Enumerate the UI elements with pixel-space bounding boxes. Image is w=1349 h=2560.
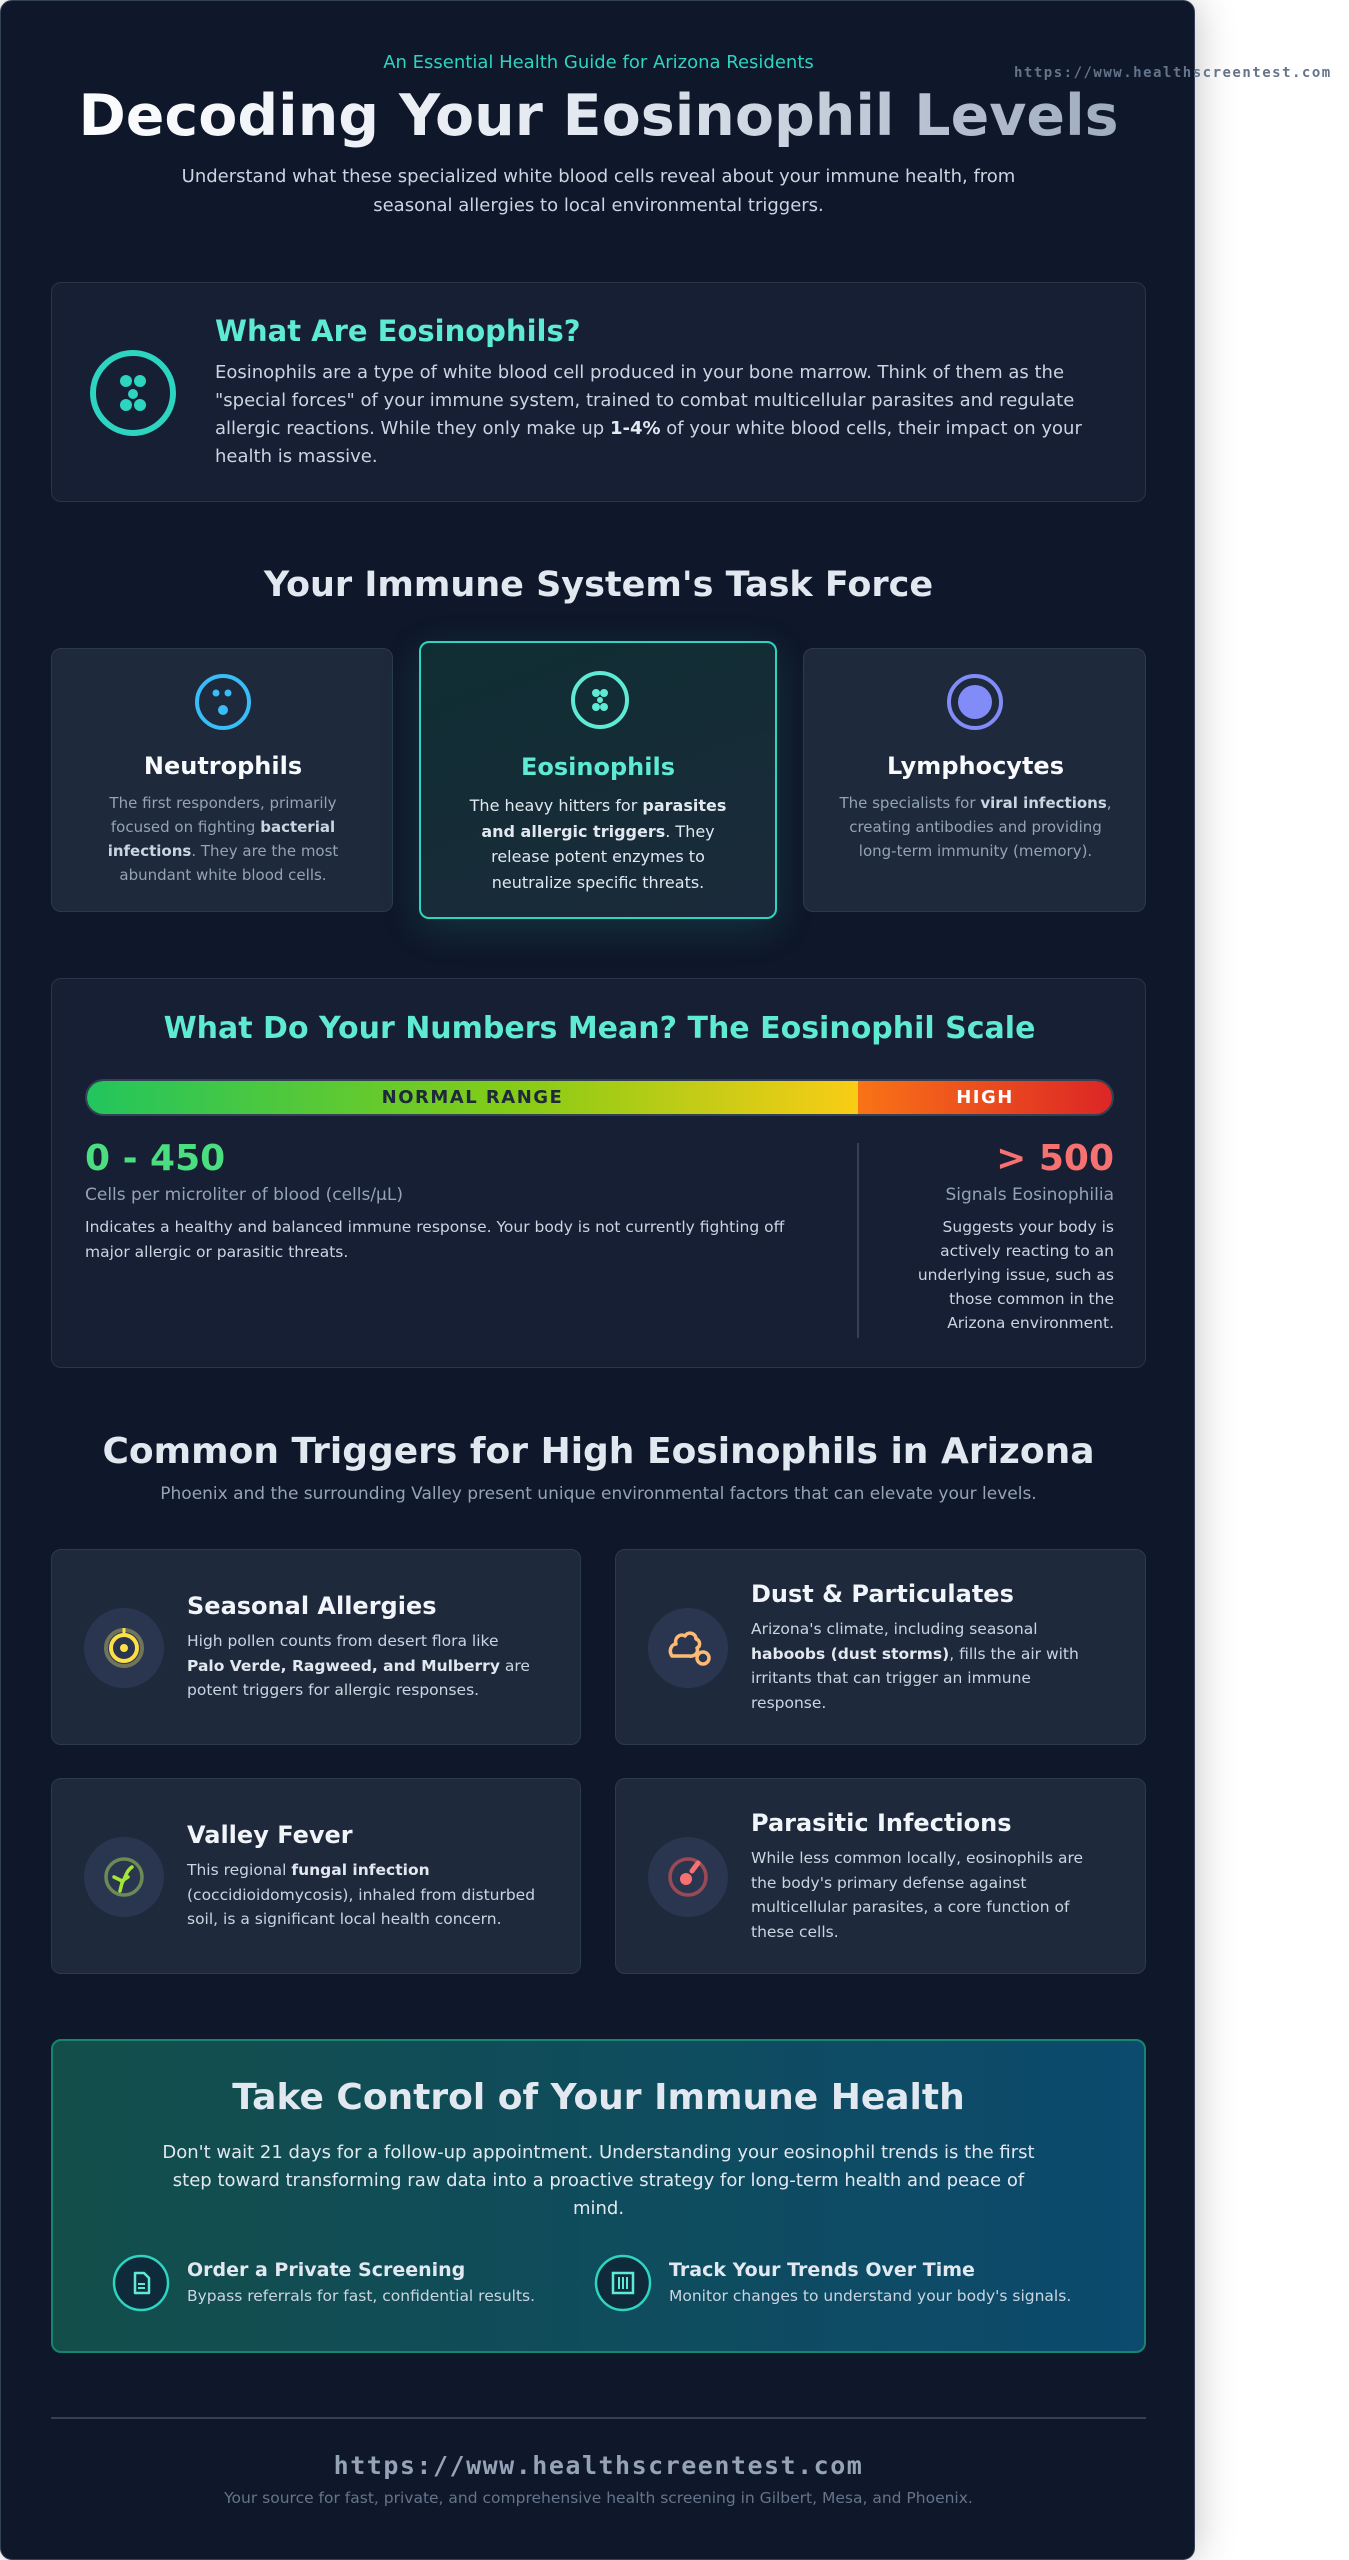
heading: What Are Eosinophils? [215,314,581,348]
text: High pollen counts from desert flora like Palo Verde, Ragweed, and Mulberry are potent triggers for allergic responses. [187,1632,530,1699]
description: The heavy hitters for parasites and allergic triggers. They release potent enzymes to neutralize specific threats. [470,796,726,892]
high segment [858,1081,1112,1114]
trigger card: valley fever [51,1778,581,1974]
icon: document [112,2254,170,2312]
high value block: Signals Eosinophilia [945,1185,1114,1205]
cta heading: Take Control of Your Immune Health [232,2077,965,2118]
high value block: Suggests your body is actively reacting to an underlying issue, such as those common in the Arizona environment. [918,1218,1114,1332]
normal value block: 0 - 450 [85,1138,225,1179]
panel: what are eosinophils [51,282,1146,502]
normal value block: Indicates a healthy and balanced immune response. Your body is not currently fighting off major allergic or parasitic threats. [85,1218,784,1261]
panel: call to action [51,2039,1146,2353]
high segment: HIGH [956,1087,1014,1108]
name: Eosinophils [521,753,675,781]
body text: Eosinophils are a type of white blood cell produced in your bone marrow. Think of them as the "special forces" of your immune system, trained to combat multicellular parasites and regulate allergic reactions. While they only make up 1-4% of your white blood cells, their impact on your health is massive. [215,362,1082,467]
icon: lymphocyte [947,674,1003,730]
panel: eosinophil scale [51,978,1146,1368]
heading: task force: Your Immune System's Task Force [264,565,933,605]
icon: neutrophil [195,674,251,730]
title: Decoding Your Eosinophil Levels [78,83,1119,149]
heading: What Do Your Numbers Mean? The Eosinophil Scale [164,1011,1035,1046]
action: track trends: Track Your Trends Over Time [669,2259,975,2281]
title: Valley Fever [187,1821,353,1849]
high value block [918,1138,1114,1332]
normal value block: Cells per microliter of blood (cells/µL) [85,1185,403,1205]
description: The specialists for viral infections, creating antibodies and providing long-term immunity (memory). [839,794,1112,860]
title: Parasitic Infections [751,1809,1011,1837]
title: Seasonal Allergies [187,1592,437,1620]
scale bar [85,1079,1114,1116]
icon: fungus [84,1837,164,1917]
icon: pollen [84,1608,164,1688]
icon: parasite [648,1837,728,1917]
action: order screening: Order a Private Screening [187,2259,465,2281]
icon: eosinophil cell [90,350,176,436]
subtitle: An Essential Health Guide for Arizona Residents [383,52,814,73]
icon: eosinophil [571,671,629,729]
icon: chart [594,2254,652,2312]
card: eosinophils (highlighted) [419,641,777,919]
name: Neutrophils [144,752,302,780]
high value block: > 500 [996,1138,1114,1179]
title: Dust & Particulates [751,1580,1014,1608]
action: track trends [594,2254,1071,2312]
footer tagline: Your source for fast, private, and comprehensive health screening in Gilbert, Mesa, and Phoenix. [224,2489,973,2507]
card: lymphocytes [803,648,1146,912]
normal range segment: NORMAL RANGE [382,1087,563,1108]
action: order screening: Bypass referrals for fast, confidential results. [187,2287,535,2305]
action: track trends: Monitor changes to understand your body's signals. [669,2287,1071,2305]
icon: dust cloud [648,1608,728,1688]
trigger card: dust [615,1549,1146,1745]
footer url: https://www.healthscreentest.com [334,2451,863,2480]
action: order screening [112,2254,535,2312]
trigger card: seasonal allergies [51,1549,581,1745]
cta body: Don't wait 21 days for a follow-up appointment. Understanding your eosinophil trends is the first step toward transforming raw data into a proactive strategy for long-term health and peace of mind. [162,2142,1035,2219]
description: The first responders, primarily focused on fighting bacterial infections. They are the most abundant white blood cells. [108,794,338,884]
intro text: Understand what these specialized white blood cells reveal about your immune health, from seasonal allergies to local environmental triggers. [182,166,1015,216]
card: neutrophils [51,648,393,912]
text: While less common locally, eosinophils are the body's primary defense against multicellular parasites, a core function of these cells. [751,1849,1083,1940]
watermark url: https://www.healthscreentest.com [1014,65,1332,81]
normal value block [85,1138,785,1261]
name: Lymphocytes [887,752,1064,780]
triggers subtitle: Phoenix and the surrounding Valley present unique environmental factors that can elevate your levels. [160,1484,1037,1504]
heading: triggers: Common Triggers for High Eosinophils in Arizona [102,1431,1095,1472]
normal range segment [87,1081,858,1114]
text: This regional fungal infection (coccidioidomycosis), inhaled from disturbed soil, is a significant local health concern. [187,1861,535,1928]
text: Arizona's climate, including seasonal haboobs (dust storms), fills the air with irritants that can trigger an immune response. [751,1620,1079,1712]
trigger card: parasitic [615,1778,1146,1974]
